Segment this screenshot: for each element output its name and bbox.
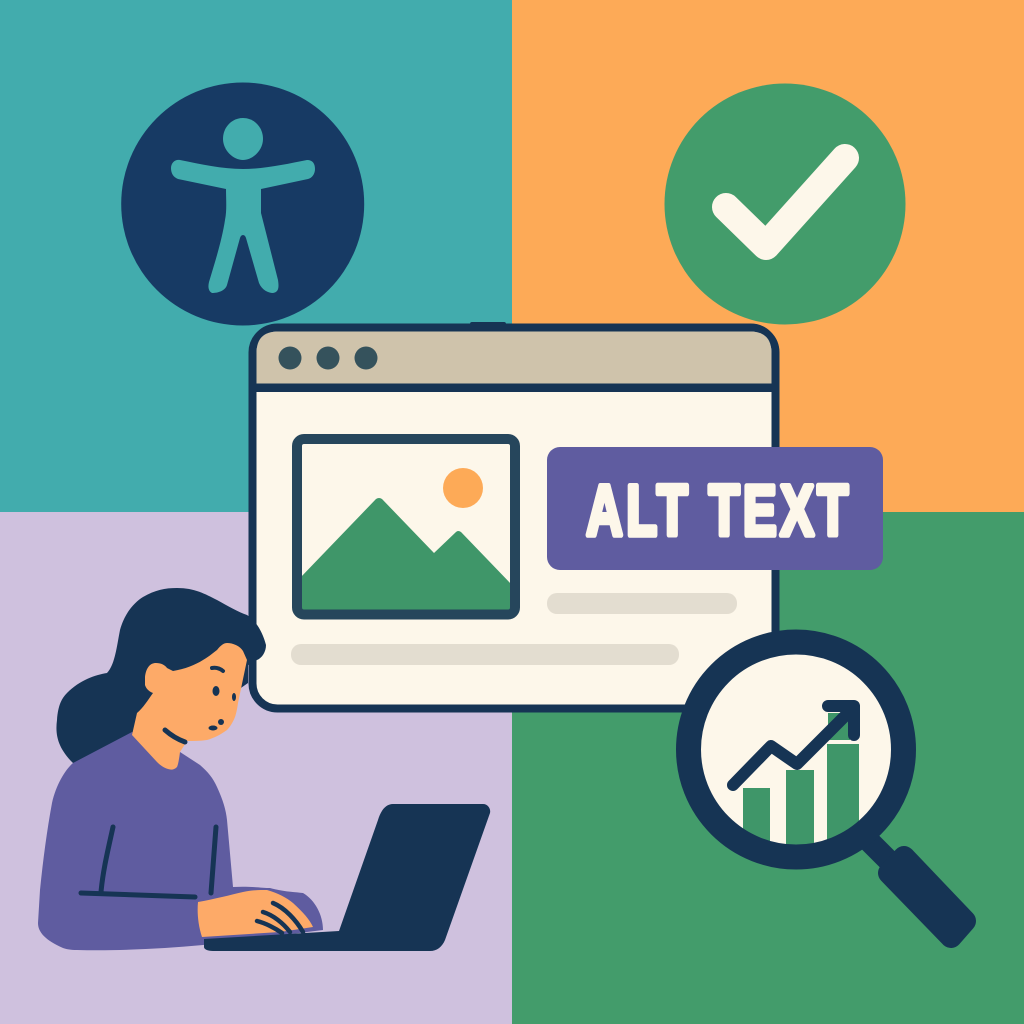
bar chart xyxy=(743,713,859,844)
trend arrow xyxy=(733,711,850,785)
panel: teal background xyxy=(0,0,512,512)
lens ring xyxy=(688,642,904,857)
fingers xyxy=(257,903,303,933)
icon: check mark xyxy=(664,84,906,324)
panel: lavender background xyxy=(0,512,512,1024)
browser title bar xyxy=(256,332,772,384)
alt text label: ALT TEXT xyxy=(586,472,852,551)
text line short xyxy=(547,593,737,614)
browser window xyxy=(252,322,776,708)
lens xyxy=(696,650,896,850)
handle connector xyxy=(860,832,890,862)
magnifying glass with chart xyxy=(688,642,965,937)
face and neck xyxy=(132,643,247,770)
person using laptop xyxy=(38,588,490,951)
icon: accessibility figure xyxy=(121,82,364,326)
panel: orange background xyxy=(512,0,1024,512)
text line long xyxy=(291,644,679,665)
facial features xyxy=(165,668,223,742)
torso xyxy=(38,732,323,950)
laptop xyxy=(204,804,490,951)
alt text label xyxy=(547,447,883,570)
hair xyxy=(56,588,266,763)
hand xyxy=(198,890,313,937)
window control dots xyxy=(278,346,378,370)
handle grip xyxy=(889,857,965,937)
panel: green background xyxy=(512,512,1024,1024)
sweater lines xyxy=(81,827,216,897)
image placeholder xyxy=(297,439,515,614)
